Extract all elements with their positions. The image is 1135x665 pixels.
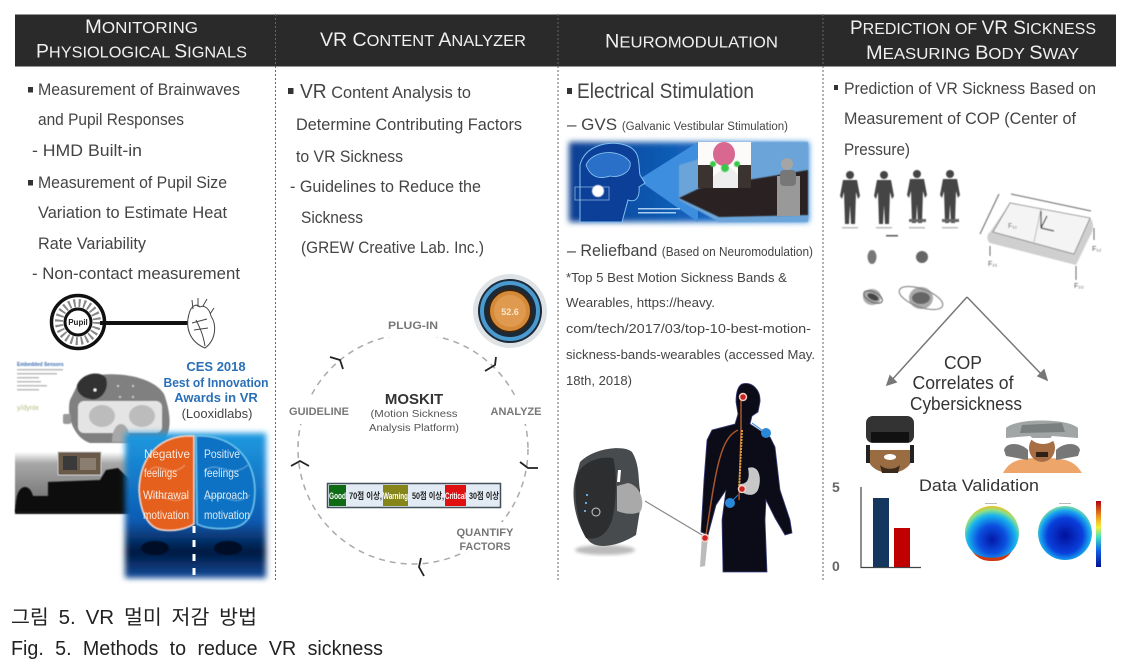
panel: neuromodulation text: com/tech/2017/03/top-10-best-motion- — [566, 321, 811, 336]
image: balance board — [980, 194, 1102, 290]
panel: monitoring physiological signals text — [28, 80, 240, 283]
caption: English: Fig. 5. Methods to reduce VR sickness — [11, 638, 383, 660]
brain labels: feelings — [204, 466, 239, 480]
bar chart: score comparison: 0 — [832, 558, 840, 574]
header bar — [15, 14, 1116, 66]
panel: monitoring physiological signals text: Measurement of Pupil Size — [38, 173, 227, 192]
brain labels: motivation — [143, 508, 189, 522]
MOSKIT title: (Motion Sickness — [370, 409, 458, 420]
panel: neuromodulation text: sickness-bands-wearables (accessed May. — [566, 347, 815, 362]
panel: prediction of VR sickness text: Pressure) — [844, 140, 910, 159]
chart: EEG topographic maps — [965, 501, 1101, 567]
cycle labels: PLUG-IN — [388, 320, 438, 332]
cycle labels: GUIDELINE — [289, 406, 349, 418]
panel: VR content analyzer text: - Guidelines to Reduce the — [290, 177, 481, 196]
panel: prediction of VR sickness text: Measurement of COP (Center of — [844, 109, 1076, 128]
brain labels: Withrawal — [143, 488, 189, 502]
legend: score thresholds: 30점 이상 — [469, 490, 500, 501]
MOSKIT title — [369, 391, 459, 434]
diagram: MOSKIT cycle — [285, 315, 546, 576]
chart: stabilograms — [862, 235, 946, 314]
callout: CES 2018 award: CES 2018 — [186, 359, 246, 374]
icon: score gauge: 52.6 — [501, 307, 519, 317]
image: balance board: F₂₂ — [1074, 283, 1084, 290]
chevrons — [291, 357, 538, 576]
panel: monitoring physiological signals text: and Pupil Responses — [38, 110, 184, 129]
panel: prediction of VR sickness text: Prediction of VR Sickness Based on — [844, 79, 1096, 98]
panel: neuromodulation text: Wearables, https://heavy. — [566, 295, 715, 310]
MOSKIT title: MOSKIT — [385, 391, 443, 408]
connector line — [645, 501, 702, 535]
heading: VR content analyzer: VR CONTENT ANALYZER — [320, 30, 526, 51]
heading: monitoring physiological signals: MONITORING — [85, 17, 198, 38]
panel: monitoring physiological signals text: Variation to Estimate Heat — [38, 203, 227, 222]
panel: prediction of VR sickness text — [834, 79, 1096, 159]
heading: prediction of VR sickness measuring body sway: PREDICTION OF VR SICKNESS — [850, 18, 1096, 39]
arrows: cop split — [887, 297, 1047, 385]
heading: prediction of VR sickness measuring body sway: MEASURING BODY SWAY — [866, 43, 1079, 64]
image: brain hemispheres — [125, 433, 266, 582]
panel: monitoring physiological signals text: - Non-contact measurement — [32, 264, 240, 283]
heading: neuromodulation: NEUROMODULATION — [605, 32, 778, 52]
colorbar — [1096, 501, 1101, 567]
image: GVS head and scene — [569, 142, 809, 222]
image: headset — [63, 374, 170, 443]
icon: pupil to heart diagram — [52, 296, 215, 348]
panel: VR content analyzer text: to VR Sickness — [296, 147, 403, 166]
gvs scene — [679, 142, 808, 222]
legend: score thresholds: Good — [329, 491, 346, 501]
heading: monitoring physiological signals: PHYSIOLOGICAL SIGNALS — [36, 42, 247, 62]
brain labels: Approach — [204, 488, 248, 502]
callout: CES 2018 award — [164, 359, 269, 421]
heading: monitoring physiological signals — [36, 17, 247, 62]
body markers — [702, 394, 771, 542]
panel: VR content analyzer text — [288, 81, 522, 257]
panel: VR content analyzer text: (GREW Creative Lab. Inc.) — [301, 238, 484, 257]
legend: score thresholds: 70점 이상, — [349, 490, 382, 501]
legend: score thresholds — [328, 484, 500, 508]
brain labels: feelings — [144, 466, 177, 480]
caption: Korean: 그림 5. VR 멀미 저감 방법 — [11, 606, 257, 629]
bar chart: score comparison: 5 — [832, 479, 840, 495]
panel: neuromodulation text: *Top 5 Best Motion Sickness Bands & — [566, 270, 787, 285]
cycle labels: ANALYZE — [490, 406, 542, 418]
icon: score gauge — [473, 274, 547, 348]
cycle labels: FACTORS — [460, 541, 510, 553]
legend: score thresholds: Critical — [445, 491, 466, 501]
brain labels: motivation — [204, 508, 250, 522]
legend: score thresholds: 50점 이상, — [412, 490, 444, 501]
image: enobio sensor spec list — [17, 362, 64, 412]
callout: CES 2018 award: (Looxidlabs) — [182, 406, 252, 421]
panel: monitoring physiological signals text: - HMD Built-in — [32, 141, 142, 160]
MOSKIT title: Analysis Platform) — [369, 423, 459, 434]
panel: neuromodulation text: 18th, 2018) — [566, 373, 632, 388]
image: balance board: F₁₂ — [1092, 246, 1102, 253]
panel: VR content analyzer text: VR Content Analysis to — [300, 81, 471, 103]
legend: score thresholds: Warning — [383, 491, 408, 501]
brain labels: Positive — [204, 447, 240, 461]
panel: monitoring physiological signals text: Measurement of Brainwaves — [38, 80, 240, 99]
cycle labels: QUANTIFY — [456, 527, 514, 539]
image: human body nerve diagram — [700, 383, 792, 572]
brain labels — [143, 447, 250, 522]
panel: neuromodulation text: – Reliefband (Based on Neuromodulation) — [567, 241, 813, 260]
heading: prediction of VR sickness measuring body sway — [850, 18, 1096, 64]
image: reliefband wristband — [573, 448, 642, 555]
panel: VR content analyzer text: Sickness — [301, 208, 363, 227]
heading: COP correlates of cybersickness: Correlates of — [912, 373, 1014, 393]
image: balance board: F₁₁ — [1008, 223, 1018, 230]
panel: VR content analyzer text: Determine Contributing Factors — [296, 115, 522, 134]
image: enobio sensor spec list: Embedded Sensors — [17, 362, 64, 368]
panel: monitoring physiological signals text: Rate Variability — [38, 234, 146, 253]
heading: COP correlates of cybersickness: COP — [944, 353, 982, 373]
cycle labels — [289, 320, 542, 553]
image: balance board: F₂₁ — [988, 261, 998, 268]
image: person with oculus headset — [866, 416, 914, 473]
panel: neuromodulation text: Electrical Stimulation — [577, 80, 754, 103]
image: person with head-mounted device — [1003, 420, 1082, 473]
icon: heart — [188, 298, 215, 348]
icon: pupil to heart diagram: Pupil — [68, 318, 88, 327]
heading: data validation: Data Validation — [919, 476, 1039, 495]
brain labels: Negative — [144, 447, 190, 461]
image: virtual scene silhouette — [15, 452, 135, 514]
panel: neuromodulation text: – GVS (Galvanic Vestibular Stimulation) — [567, 115, 788, 134]
image: enobio sensor spec list: y/dynix — [17, 405, 39, 412]
bar chart: score comparison — [832, 479, 921, 574]
callout: CES 2018 award: Best of Innovation — [164, 375, 269, 390]
callout: CES 2018 award: Awards in VR — [174, 390, 258, 405]
panel: neuromodulation text — [566, 80, 815, 388]
heading: COP correlates of cybersickness — [910, 353, 1022, 414]
heading: COP correlates of cybersickness: Cybersickness — [910, 394, 1022, 414]
image: standing figures — [840, 170, 960, 228]
